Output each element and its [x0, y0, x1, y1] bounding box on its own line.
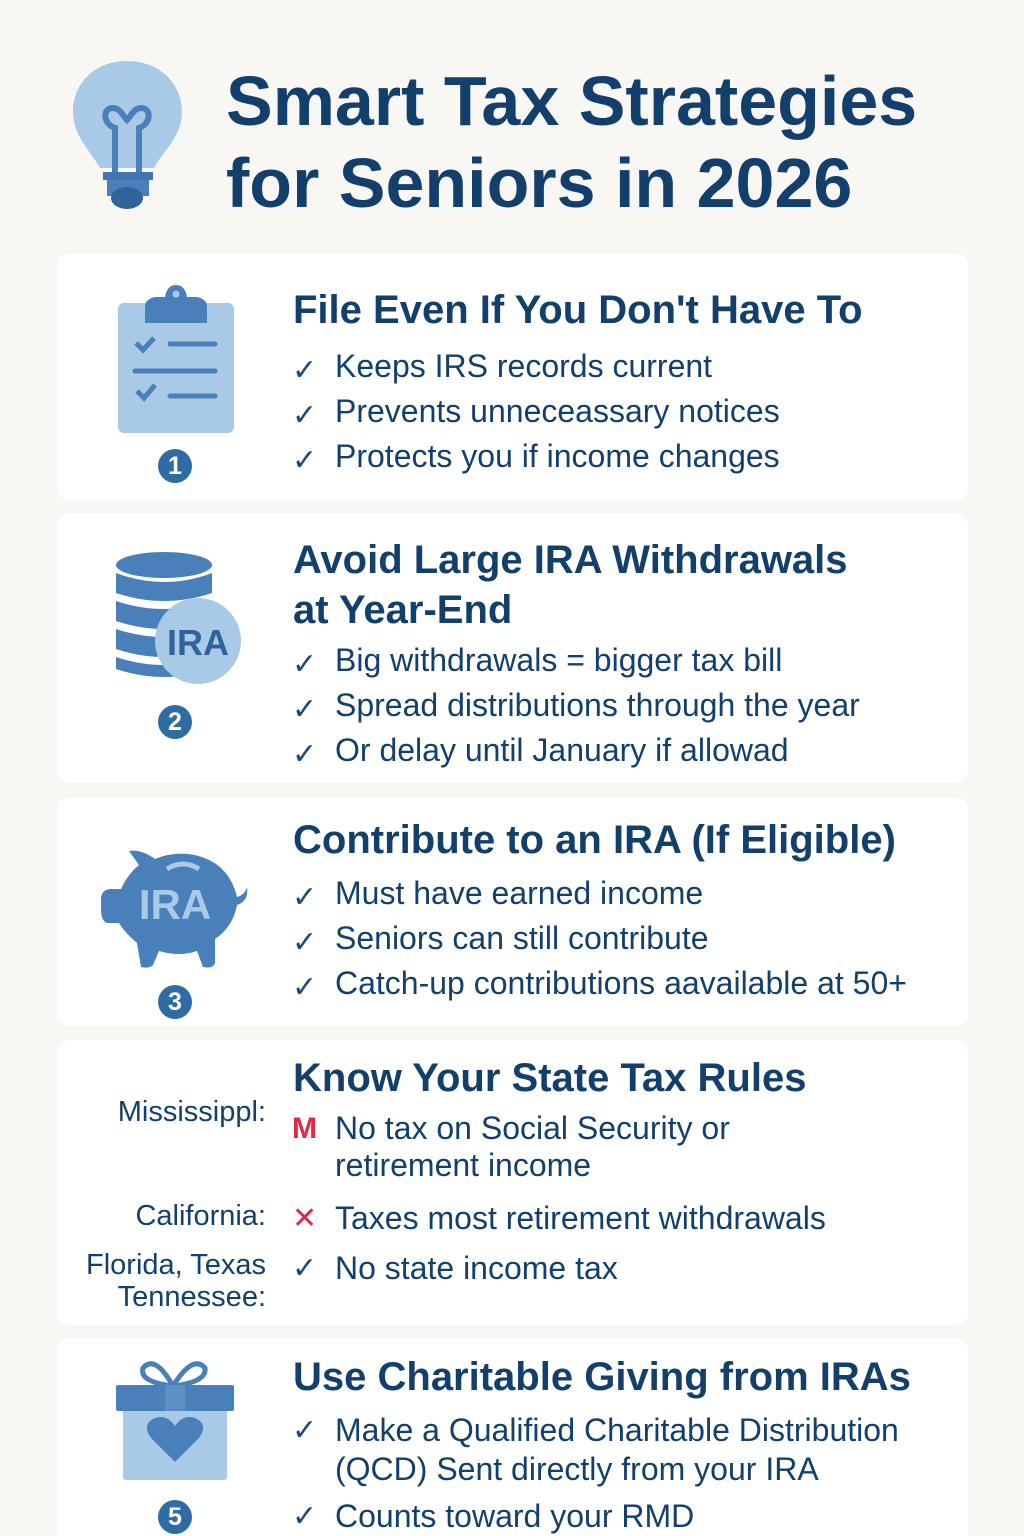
panel: state tax rules	[57, 1040, 968, 1325]
bullets: Seniors can still contribute	[335, 920, 709, 956]
bullets	[292, 1412, 899, 1487]
panel: file even if: ✓	[292, 353, 317, 388]
row: Mississippi	[292, 1110, 730, 1183]
row: Mississippi: retirement income	[335, 1147, 591, 1183]
label: Florida Texas Tennessee: Tennessee:	[118, 1281, 266, 1313]
bullets: Make a Qualified Charitable Distribution	[335, 1412, 899, 1448]
panel: contribute	[57, 797, 968, 1026]
panel: charitable giving: ✓	[292, 1499, 317, 1534]
panel: IRA withdrawals: ✓	[292, 692, 317, 727]
bullet: RMD: Counts toward your RMD	[335, 1498, 694, 1534]
number 1	[158, 449, 192, 483]
number 5: 5	[168, 1503, 182, 1531]
panel: contribute: ✓	[292, 925, 317, 960]
bullets: Must have earned income	[335, 875, 703, 911]
panel: charitable giving: ✓	[292, 1413, 317, 1448]
bullets: Or delay until January if allowad	[335, 732, 789, 768]
title	[226, 62, 917, 222]
icon: clipboard	[118, 285, 234, 433]
bullets: Catch-up contributions aavailable at 50+	[335, 965, 907, 1001]
heading: Avoid Large IRA Withdrawals	[293, 538, 848, 582]
heading: Contribute to an IRA (If Eligible)	[293, 818, 896, 862]
icon: piggy bank: IRA	[139, 881, 211, 928]
bullets: Keeps IRS records current	[335, 348, 712, 384]
row: Florida: No state income tax	[335, 1250, 618, 1286]
bullets: (QCD) Sent directly from your IRA	[335, 1451, 819, 1487]
panel: contribute: ✓	[292, 970, 317, 1005]
heading: Know Your State Tax Rules	[293, 1056, 806, 1100]
label: California: California:	[135, 1200, 266, 1232]
title: Smart Tax Strategies	[226, 62, 917, 140]
heading: File Even If You Don't Have To	[293, 288, 863, 332]
panel: IRA withdrawals: ✓	[292, 737, 317, 772]
panel: file even if: ✓	[292, 398, 317, 433]
icon: coin stack IRA: IRA	[167, 622, 229, 663]
bullets: Spread distributions through the year	[335, 687, 860, 723]
number 3: 3	[168, 988, 182, 1016]
panel: contribute: ✓	[292, 880, 317, 915]
panel: state tax rules: ✓	[292, 1251, 317, 1286]
bullets	[292, 642, 860, 772]
bullets	[292, 348, 780, 478]
icon: piggy bank	[101, 850, 248, 968]
bullets: Prevents unneceassary notices	[335, 393, 780, 429]
number 1: 1	[168, 452, 182, 480]
icon: gift	[116, 1361, 234, 1480]
heading: Use Charitable Giving from IRAs	[293, 1355, 911, 1399]
panel: IRA withdrawals: ✓	[292, 647, 317, 682]
heading: at Year-End	[293, 588, 512, 632]
label: Mississippi: Mississippl:	[118, 1096, 266, 1128]
panel: IRA withdrawals	[57, 513, 968, 783]
panel: state tax rules: M	[292, 1112, 317, 1145]
bullets	[292, 875, 907, 1005]
number 2: 2	[168, 708, 182, 736]
panel: charitable giving	[57, 1338, 968, 1536]
row: California: Taxes most retirement withdrawals	[335, 1200, 826, 1236]
number 5	[158, 1500, 192, 1534]
number 2	[158, 705, 192, 739]
bullets: Protects you if income changes	[335, 438, 780, 474]
row: Mississippi: No tax on Social Security or	[335, 1110, 730, 1146]
panel: state tax rules: ✕	[292, 1201, 317, 1236]
icon: coin stack IRA	[116, 552, 241, 684]
bullets: Big withdrawals = bigger tax bill	[335, 642, 782, 678]
panel: file even if: ✓	[292, 443, 317, 478]
heading	[293, 538, 848, 632]
label: Florida Texas Tennessee: Florida, Texas	[86, 1249, 266, 1281]
label: Florida Texas Tennessee	[86, 1249, 266, 1313]
title: for Seniors in 2026	[226, 144, 852, 222]
icon: light bulb	[72, 61, 182, 209]
number 3	[158, 985, 192, 1019]
panel: file even if	[57, 253, 968, 500]
